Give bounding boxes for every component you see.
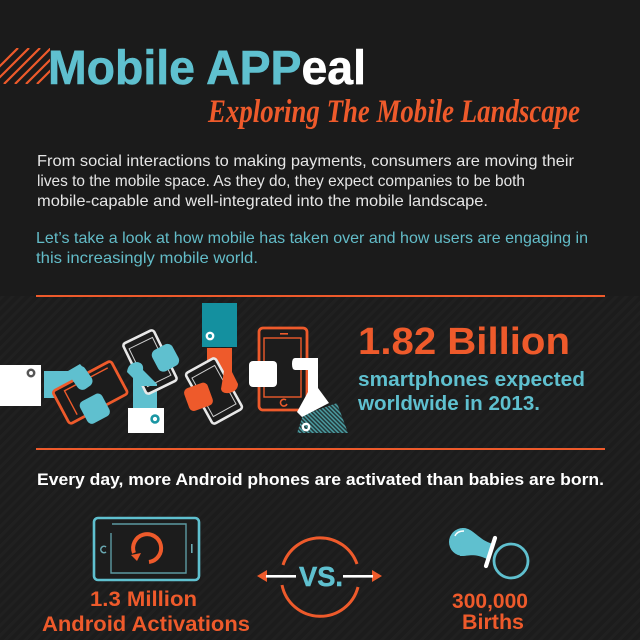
versus symbol bbox=[257, 538, 382, 616]
intro text: mobile-capable and well-integrated into the mobile landscape. bbox=[37, 193, 488, 210]
teal intro text: this increasingly mobile world. bbox=[36, 250, 258, 267]
statistic: 1.82 billion smartphones: 1.82 Billion bbox=[358, 321, 570, 363]
icon: pacifier bbox=[449, 528, 528, 578]
statistic: 1.82 billion smartphones bbox=[357, 321, 585, 415]
android activations statistic: Android Activations bbox=[42, 613, 250, 636]
hand with orange phone bbox=[249, 328, 348, 433]
births statistic: 300,000 bbox=[452, 590, 528, 613]
statistic: 1.82 billion smartphones: smartphones expected bbox=[358, 369, 585, 391]
versus symbol: VS. bbox=[299, 561, 343, 592]
icon: android phone with refresh bbox=[94, 518, 199, 580]
statistic: 1.82 billion smartphones: worldwide in 2013. bbox=[357, 393, 540, 415]
android activations statistic bbox=[42, 588, 250, 636]
arrow right bbox=[343, 570, 382, 582]
intro text: lives to the mobile space. As they do, they expect companies to be both bbox=[37, 173, 525, 190]
illustration: hands holding smartphones bbox=[0, 303, 348, 433]
hand with white phone from above bbox=[183, 303, 243, 425]
title stripes bbox=[0, 48, 50, 84]
section heading: Every day, more Android phones are activated than babies are born. bbox=[37, 470, 604, 489]
android activations statistic: 1.3 Million bbox=[90, 588, 197, 611]
header bbox=[0, 42, 580, 130]
intro text: From social interactions to making payments, consumers are moving their bbox=[37, 153, 575, 170]
arrow left bbox=[257, 570, 296, 582]
teal intro text: Let’s take a look at how mobile has taken over and how users are engaging in bbox=[36, 230, 588, 247]
teal intro text bbox=[36, 230, 588, 267]
hand with white phone bbox=[122, 329, 181, 433]
textured lower background bbox=[0, 296, 640, 640]
title: Mobile APPeal bbox=[48, 42, 366, 95]
hand with orange phone bbox=[0, 361, 128, 426]
births statistic: Births bbox=[462, 611, 524, 634]
births statistic bbox=[452, 590, 528, 634]
intro text bbox=[37, 153, 575, 210]
